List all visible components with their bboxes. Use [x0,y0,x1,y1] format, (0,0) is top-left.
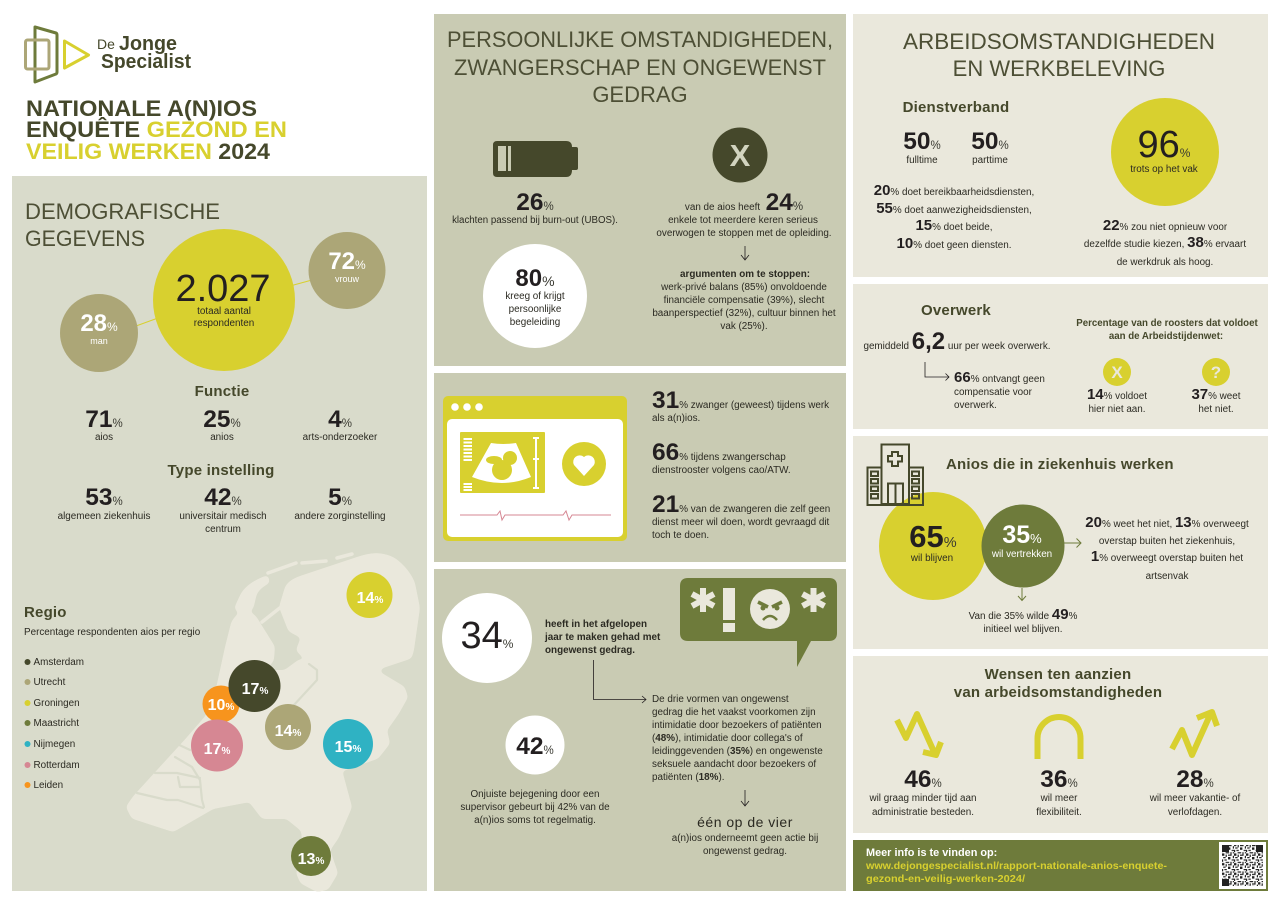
bubble: 96% trots op het vak [1111,98,1219,206]
heading: persoonlijke omstandigheden: ZWANGERSCHAP EN ONGEWENST [454,55,826,80]
logo: De Jonge Specialist: De [97,36,115,52]
text: zwangerschap statistieken: 66% tijdens zwangerschap [652,439,786,466]
stats: functie: arts-onderzoeker [303,432,378,443]
map bubbles: regio percentages: 14% [275,723,301,740]
text: een op de vier: a(n)ios onderneemt geen actie bij [672,833,818,844]
section: arbeidstijdenwet: het niet. [1198,404,1234,415]
stat: 36% flexibiliteit: wil meer [1040,793,1078,804]
text: drie vormen van ongewenst gedrag: intimidatie door bezoekers of patiënten [652,720,822,731]
panel: zwangerschap [434,373,846,562]
legend: regio: Utrecht [34,677,66,688]
section: arbeidstijdenwet: ? [1211,363,1221,382]
text: argumenten om te stoppen: argumenten om te stoppen: [680,269,810,280]
stat: 36% flexibiliteit [1036,766,1082,818]
logo: De Jonge Specialist [26,27,191,82]
icon: lege batterij [493,141,578,177]
bubble: 65% wil blijven: 65% [909,519,957,554]
stats: type instelling: algemeen ziekenhuis [58,511,150,522]
text: opnieuw kiezen en werkdruk [1084,217,1246,268]
text: initieel blijven: Van die 35% wilde 49% [969,606,1078,623]
bubble: totaal respondenten en geslacht: vrouw [335,274,360,284]
stats: functie: Functie [195,383,249,400]
text: opnieuw kiezen en werkdruk: 22% zou niet opnieuw voor [1103,217,1228,234]
text: argumenten om te stoppen: financiële compensatie (39%), slecht [664,295,825,306]
bubble: totaal respondenten en geslacht: 2.027 [175,268,271,310]
stats: type instelling: universitair medisch [179,511,267,522]
stats: functie: 4% [328,406,352,433]
logo: De Jonge Specialist: Specialist [101,51,191,73]
title: NATIONALE A(N)IOS [26,96,257,121]
bubble: 65% wil blijven [879,492,987,600]
text: opnieuw kiezen en werkdruk: de werkdruk als hoog. [1117,257,1213,268]
stat: begeleiding 80%: 80% [515,265,555,292]
arrow: naar argumenten [741,246,749,260]
heading: demografische gegevens: DEMOGRAFISCHE [25,199,220,224]
bubble: totaal respondenten en geslacht: 28% [80,310,118,337]
heading: wensen [954,666,1162,701]
section: dienstverband: 15% doet beide, [915,217,993,234]
section: arbeidstijdenwet: hier niet aan. [1088,404,1146,415]
section: overwerk [863,302,1051,355]
heading: demografische gegevens [25,199,220,251]
map bubbles: regio percentages: 14% [357,590,383,607]
map bubbles: regio percentages [191,572,392,876]
text: opnieuw kiezen en werkdruk: dezelfde studie kiezen, 38% ervaart [1084,234,1246,251]
title: ENQUÊTE GEZOND EN [26,117,287,142]
icon: ziekenhuis [868,444,923,505]
panel: wensen arbeidsomstandigheden [853,656,1268,833]
text: drie vormen van ongewenst gedrag: leidinggevenden (35%) en ongewenste [652,746,823,757]
section: overwerk: Overwerk [921,302,991,319]
section: dienstverband: 50% [971,128,1009,155]
icon: echo scherm [443,396,627,541]
stat: 28% vakantiedagen: wil meer vakantie- of [1149,793,1241,804]
stat: begeleiding 80%: kreeg of krijgt [505,291,565,302]
stat: stoppen met opleiding 24%: enkele tot meerdere keren serieus [668,215,818,226]
text: drie vormen van ongewenst gedrag: seksuele aandacht door bezoekers of [652,759,816,770]
stat: 42% onjuiste bejegening: Onjuiste bejegening door een [470,789,600,800]
stat: 46% minder administratie: administratie besteden. [872,807,974,818]
section: dienstverband: 55% doet aanwezigheidsdiensten, [876,200,1032,217]
stats: functie: 71% [85,406,123,433]
section: dienstverband: 10% doet geen diensten. [897,235,1011,252]
panel: anios in ziekenhuis [853,436,1268,649]
section: arbeidstijdenwet [1076,318,1258,415]
text: een op de vier: ongewenst gedrag. [703,846,787,857]
text: overstap [1085,514,1249,582]
arrow: naar compensatie [925,362,949,380]
bubble: 35% wil vertrekken [982,504,1064,588]
icon: boze tekstballon [680,578,837,667]
icon: pijl omhoog [1172,712,1217,755]
stats: type instelling: 42% [204,484,242,511]
bubble: totaal respondenten en geslacht: respondenten [194,318,254,329]
panel: overwerk [853,284,1268,429]
bubble: 35% wil vertrekken: wil vertrekken [991,549,1052,560]
section: arbeidstijdenwet: Percentage van de roosters dat voldoet [1076,318,1258,329]
text: drie vormen van ongewenst gedrag [652,694,823,783]
heading: demografische gegevens: GEGEVENS [25,226,145,251]
map bubbles: regio percentages: 13% [298,851,324,868]
text: compensatie [954,369,1045,411]
stat: 42% onjuiste bejegening: supervisor gebeurt bij 42% van de [460,802,610,813]
stats: type instelling: Type instelling [168,462,274,479]
text: zwangerschap statistieken: dienstrooster volgens cao/ATW. [652,465,791,476]
text: argumenten om te stoppen: vak (25%). [720,321,768,332]
icon: X in cirkel: X [730,138,751,173]
panel: arbeidsomstandigheden en werkbeleving [853,14,1268,277]
stats: type instelling [58,462,386,535]
map bubbles: regio percentages: 17% [204,741,230,758]
section: arbeidstijdenwet: 37% weet [1191,386,1241,403]
text: argumenten om te stoppen [652,269,836,332]
bubble: 35% wil vertrekken: 35% [1002,521,1042,549]
section: arbeidstijdenwet: aan de Arbeidstijdenwet: [1109,331,1223,342]
text: initieel blijven [969,606,1078,635]
text: zwangerschap statistieken: als a(n)ios. [652,413,700,424]
icon: X in cirkel [712,128,768,182]
stat: stoppen met opleiding 24%: van de aios heeft 24% [685,189,803,216]
legend: regio [24,604,201,791]
bubble: totaal respondenten en geslacht: man [90,336,108,346]
text: initieel blijven: initieel wel blijven. [983,624,1063,635]
stat: 46% minder administratie: wil graag minder tijd aan [868,793,977,804]
text: overstap: overstap buiten het ziekenhuis, [1099,536,1235,547]
icon: pijl omlaag [897,714,941,755]
stats: functie: aios [95,432,113,443]
text: zwangerschap statistieken: toch te doen. [652,530,709,541]
stat: burn-out 26%: 26% [516,189,554,216]
legend: regio: Regio [24,604,67,621]
panel: persoonlijke omstandigheden [434,14,846,366]
text: argumenten om te stoppen: werk-privé balans (85%) onvoldoende [660,282,827,293]
panel: ongewenst gedrag [434,569,846,891]
text: drie vormen van ongewenst gedrag: patiënten (18%). [652,772,724,783]
section: dienstverband: 20% doet bereikbaarheidsdiensten, [874,182,1034,199]
bubble: totaal respondenten en geslacht [60,229,386,372]
text: meer info link: Meer info is te vinden op: [866,847,997,859]
stats: type instelling: centrum [205,524,241,535]
legend: regio: Rotterdam [34,760,80,771]
text: meer info link: gezond-en-veilig-werken-2024/ [866,873,1025,885]
text: compensatie: compensatie voor [954,387,1033,398]
stat: 34% ongewenst gedrag [442,593,661,683]
heading: wensen: Wensen ten aanzien [985,666,1131,683]
stat: 34% ongewenst gedrag: ongewenst gedrag. [545,645,635,656]
title [26,96,287,164]
legend: regio: Nijmegen [34,739,75,750]
stat: 34% ongewenst gedrag: 34% [461,615,514,657]
stat: burn-out 26% [452,189,618,226]
stat: 46% minder administratie: 46% [904,766,942,793]
text: zwangerschap statistieken: 31% zwanger (geweest) tijdens werk [652,387,829,414]
bubble: 65% wil blijven: wil blijven [910,553,953,564]
section: arbeidstijdenwet: 14% voldoet [1087,386,1147,403]
map: Nederland [128,554,418,890]
legend: regio: Leiden [34,780,63,791]
stat: 28% vakantiedagen: 28% [1176,766,1214,793]
stat: stoppen met opleiding 24%: overwogen te stoppen met de opleiding. [656,228,832,239]
logo: De Jonge Specialist: Jonge [119,33,177,55]
legend: regio: Maastricht [34,718,79,729]
stat: 36% flexibiliteit: 36% [1040,766,1078,793]
bubble: totaal respondenten en geslacht: 72% [328,248,366,275]
heading: persoonlijke omstandigheden: GEDRAG [592,82,688,107]
text: compensatie: overwerk. [954,400,997,411]
text: overstap: 20% weet het niet, 13% overweegt [1085,514,1249,531]
stat: 36% flexibiliteit: flexibiliteit. [1036,807,1082,818]
heading: persoonlijke omstandigheden: PERSOONLIJKE OMSTANDIGHEDEN, [447,27,833,52]
panel: demografische gegevens [12,176,427,891]
text: drie vormen van ongewenst gedrag: De drie vormen van ongewenst [652,694,789,705]
bubble: 96% trots op het vak: 96% [1138,124,1191,166]
text: drie vormen van ongewenst gedrag: gedrag die het vaakst voorkomen zijn [652,707,816,718]
text: een op de vier [672,814,818,857]
stat: 42% onjuiste bejegening [460,716,610,826]
stat: 42% onjuiste bejegening: 42% [516,733,554,760]
section: dienstverband: fulltime [906,155,938,166]
stat: begeleiding 80% [483,244,587,348]
text: meer info link: www.dejongespecialist.nl/rapport-nationale-anios-enquete- [865,860,1168,872]
text: een op de vier: één op de vier [697,814,793,830]
arrow: naar initieel blijven [1018,588,1026,600]
map bubbles: regio percentages: 15% [335,739,361,756]
stats: type instelling: 53% [85,484,123,511]
stats: functie: 25% [203,406,241,433]
title: VEILIG WERKEN 2024 [26,139,271,164]
arrow: naar een op de vier [741,790,749,806]
stat: stoppen met opleiding 24% [656,189,832,239]
stats: type instelling: andere zorginstelling [294,511,386,522]
icon: QR-code [1219,842,1266,889]
bubble: 96% trots op het vak: trots op het vak [1130,164,1198,175]
section: dienstverband: Dienstverband [903,99,1009,116]
icon: boog flexibiliteit [1038,717,1080,759]
map bubbles: regio percentages: 17% [242,681,268,698]
text: overstap: artsenvak [1146,571,1188,582]
section: overwerk: gemiddeld 6,2 uur per week overwerk. [863,328,1051,355]
stat: 28% vakantiedagen: verlofdagen. [1168,807,1222,818]
stat: 28% vakantiedagen [1149,766,1241,818]
section: dienstverband [874,99,1034,252]
heading: arbeidsomstandigheden: ARBEIDSOMSTANDIGHEDEN [903,29,1215,54]
stat: 46% minder administratie [868,766,977,818]
stat: 34% ongewenst gedrag: jaar te maken gehad met [544,632,661,643]
arrow: naar drie vormen [594,660,646,703]
text: drie vormen van ongewenst gedrag: (48%), intimidatie door collega's of [652,733,803,744]
stat: begeleiding 80%: begeleiding [510,317,560,328]
stat: burn-out 26%: klachten passend bij burn-out (UBOS). [452,215,618,226]
text: overstap: 1% overweegt overstap buiten het [1091,548,1243,565]
heading: anios die in ziekenhuis werken: Anios die in ziekenhuis werken [946,456,1174,473]
bubble: totaal respondenten en geslacht: totaal aantal [197,306,251,317]
section: arbeidstijdenwet: X [1111,363,1123,382]
panel: meer info footer [853,840,1268,891]
stat: 42% onjuiste bejegening: a(n)ios soms tot regelmatig. [474,815,596,826]
stats: functie [85,383,378,443]
stats: type instelling: 5% [328,484,352,511]
text: zwangerschap statistieken: 21% van de zwangeren die zelf geen [652,491,830,518]
heading: persoonlijke omstandigheden [447,27,833,107]
section: dienstverband: 50% [903,128,941,155]
text: meer info link [865,847,1168,885]
arrow: naar overstap [1064,538,1081,548]
legend: regio: Amsterdam [34,657,84,668]
text: compensatie: 66% ontvangt geen [954,369,1045,386]
legend: regio: Groningen [34,698,80,709]
text: zwangerschap statistieken: dienst meer wil doen, wordt gevraagd dit [652,517,830,528]
map bubbles: regio percentages: 10% [208,697,234,714]
stat: begeleiding 80%: persoonlijke [509,304,562,315]
text: argumenten om te stoppen: baanperspectief (32%), cultuur binnen het [652,308,836,319]
stats: functie: anios [210,432,234,443]
heading: wensen: van arbeidsomstandigheden [954,684,1162,701]
heading: arbeidsomstandigheden [903,29,1215,81]
heading: arbeidsomstandigheden: EN WERKBELEVING [953,56,1165,81]
legend: regio: Percentage respondenten aios per regio [24,627,201,638]
stat: 34% ongewenst gedrag: heeft in het afgelopen [545,619,647,630]
section: dienstverband: parttime [972,155,1008,166]
text: zwangerschap statistieken [652,387,830,541]
